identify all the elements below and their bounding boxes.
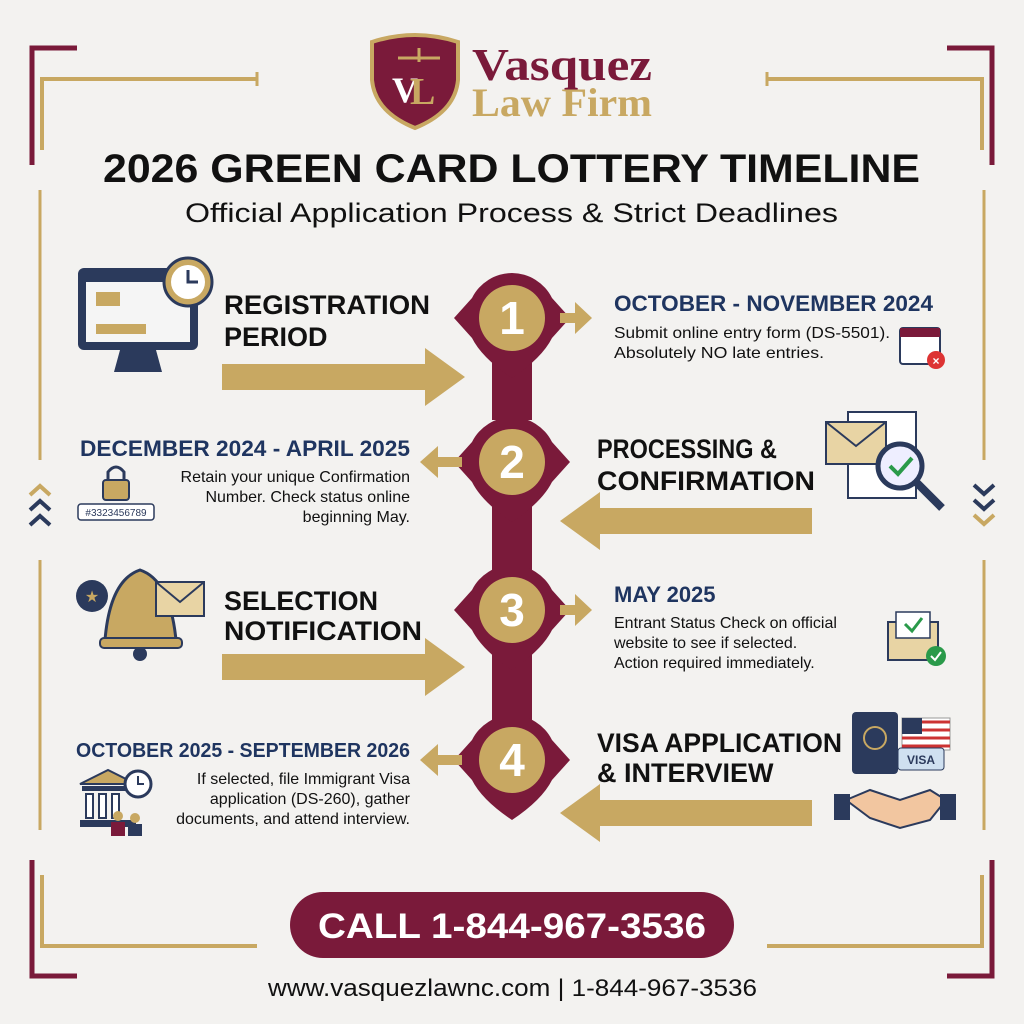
icon: bell: [76, 570, 204, 661]
icon: lock: #3323456789: [85, 508, 147, 519]
spine connectors: [492, 350, 532, 720]
step 3 label: SELECTION: [224, 586, 378, 616]
icon: passport handshake: VISA: [907, 753, 935, 767]
big arrows: [222, 348, 812, 842]
logo: L: [410, 71, 435, 113]
logo: [372, 35, 652, 128]
small arrows: [420, 302, 592, 776]
step 4 label: VISA APPLICATION: [597, 728, 842, 758]
icon: calendar: ×: [932, 354, 940, 368]
logo: Vasquez: [472, 39, 652, 90]
footer: www.vasquezlawnc.com | 1-844-967-3536: [267, 975, 757, 1002]
side chevrons: [30, 485, 994, 525]
step 4 detail: application (DS-260), gather: [210, 791, 411, 808]
step 1 detail: [614, 291, 934, 362]
step 2 label: CONFIRMATION: [597, 466, 815, 496]
CTA button: CALL 1-844-967-3536: [318, 907, 706, 946]
spine nodes: 4: [499, 734, 525, 786]
subtitle: Official Application Process & Strict Deadlines: [185, 198, 838, 228]
spine nodes: 3: [499, 584, 525, 636]
title: 2026 GREEN CARD LOTTERY TIMELINE: [103, 147, 920, 191]
step 4 detail: If selected, file Immigrant Visa: [197, 771, 410, 788]
step 1 label: PERIOD: [224, 322, 328, 352]
step 2 detail: beginning May.: [303, 509, 410, 526]
step 4 detail: [76, 740, 411, 828]
step 4 detail: OCTOBER 2025 - SEPTEMBER 2026: [76, 740, 410, 762]
step 3 label: NOTIFICATION: [224, 616, 422, 646]
step 3 detail: website to see if selected.: [613, 635, 797, 652]
logo: V: [392, 70, 418, 110]
step 3 detail: MAY 2025: [614, 582, 716, 607]
step 2 detail: Number. Check status online: [205, 489, 410, 506]
step 1 detail: Submit online entry form (DS-5501).: [614, 325, 890, 342]
spine nodes: 2: [499, 436, 525, 488]
logo: Law Firm: [472, 80, 652, 125]
step 4 label: & INTERVIEW: [597, 758, 774, 788]
step 2 label: PROCESSING &: [597, 434, 777, 464]
icon: bell: ★: [85, 589, 99, 606]
icon: calendar: [900, 328, 945, 369]
CTA button: [290, 892, 734, 958]
icon: envelope magnifier: [826, 412, 942, 508]
step 2 detail: [80, 436, 410, 526]
step 1 label: REGISTRATION: [224, 290, 430, 320]
spine nodes: [454, 273, 570, 820]
icon: computer: [78, 258, 212, 372]
step 4 detail: documents, and attend interview.: [176, 811, 410, 828]
step 2 detail: DECEMBER 2024 - APRIL 2025: [80, 436, 410, 461]
icon: passport handshake: [834, 712, 956, 828]
icon: lock: [78, 467, 154, 520]
spine nodes: 1: [499, 292, 525, 344]
step 1 detail: OCTOBER - NOVEMBER 2024: [614, 291, 934, 316]
icon: bank family: [80, 770, 151, 836]
step 3 detail: Entrant Status Check on official: [614, 615, 837, 632]
step 3 detail: [613, 582, 837, 672]
step 2 detail: Retain your unique Confirmation: [181, 469, 410, 486]
step 3 detail: Action required immediately.: [614, 655, 815, 672]
icon: envelope check: [888, 612, 946, 666]
step 1 detail: Absolutely NO late entries.: [614, 345, 824, 362]
